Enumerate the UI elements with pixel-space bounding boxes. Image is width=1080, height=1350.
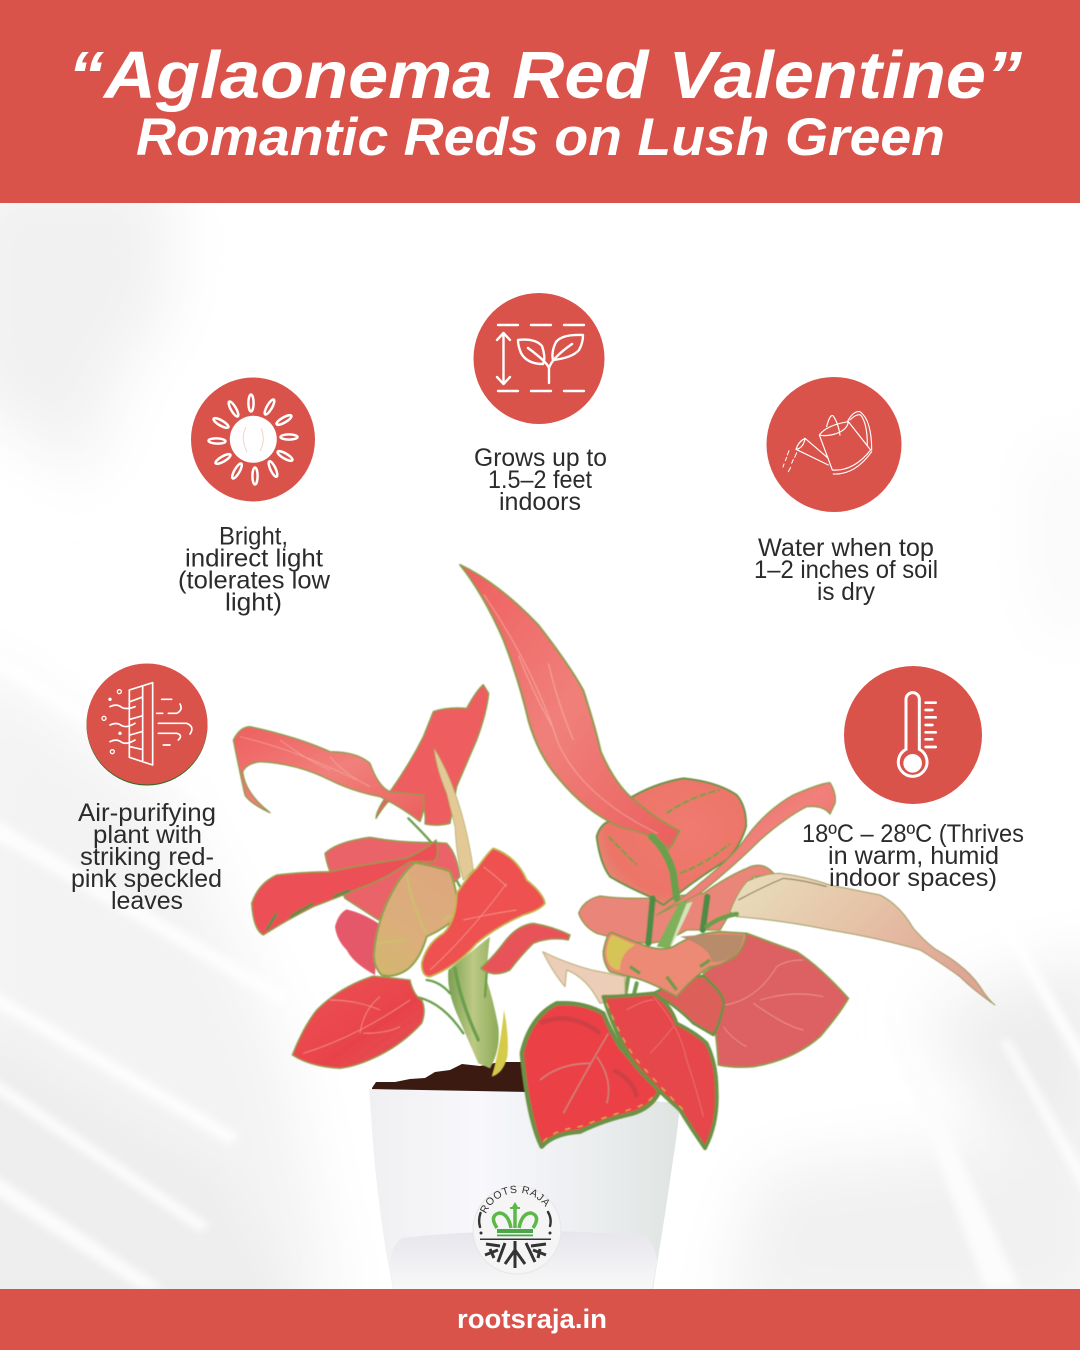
label: light bbox=[178, 522, 331, 616]
label: temperature bbox=[802, 820, 1024, 892]
label: air purifying: plant with bbox=[93, 821, 202, 849]
label: air purifying: leaves bbox=[111, 887, 183, 915]
leaf: left middle behind bbox=[325, 837, 460, 920]
header banner bbox=[0, 0, 1080, 203]
leaf: right round bbox=[597, 778, 746, 905]
right plant cluster, back bbox=[579, 865, 775, 943]
leaf: middle right behind bbox=[579, 865, 775, 943]
logo sticker: ROOTS RAJA bbox=[480, 1186, 549, 1214]
label: water: is dry bbox=[817, 578, 875, 606]
label: air purifying bbox=[71, 799, 222, 915]
leaf: left horizontal bbox=[252, 840, 437, 935]
leaf: right pointed bbox=[657, 783, 835, 915]
feature: water bbox=[754, 377, 938, 606]
pot body bbox=[369, 1089, 680, 1289]
crown bbox=[493, 1207, 537, 1228]
title: “Aglaonema Red Valentine” bbox=[68, 38, 1023, 113]
leaf: center pointed bbox=[603, 993, 717, 1148]
leaf: bright red bbox=[422, 848, 545, 977]
website url: rootsraja.in bbox=[457, 1304, 607, 1334]
feature: air purifying bbox=[71, 664, 222, 915]
feature: temperature bbox=[802, 666, 1024, 892]
pot lower band bbox=[390, 1231, 657, 1289]
label: air purifying: striking red- bbox=[80, 843, 214, 871]
leaf: upper left standing bbox=[376, 685, 489, 825]
leaf: lower left behind bbox=[335, 909, 378, 975]
soil bbox=[372, 1062, 532, 1095]
label: temperature: in warm, humid bbox=[828, 842, 999, 870]
leaf: upper left drooping bbox=[233, 727, 424, 822]
leaf: large right bbox=[703, 933, 848, 1067]
label: light: Bright, bbox=[219, 522, 288, 550]
leaf: bottom left bbox=[292, 976, 424, 1068]
footer banner bbox=[0, 1289, 1080, 1350]
feature: height bbox=[474, 293, 607, 516]
right stems bbox=[625, 837, 737, 997]
label: light: light) bbox=[225, 588, 282, 616]
subtitle: Romantic Reds on Lush Green bbox=[136, 108, 945, 167]
leaf: narrow tan spike bbox=[434, 748, 473, 880]
label: temperature: indoor spaces) bbox=[829, 864, 997, 892]
label: light: (tolerates low bbox=[178, 566, 331, 594]
plant bbox=[233, 565, 995, 1148]
label: air purifying: pink speckled bbox=[71, 865, 222, 893]
icon: watering can bbox=[766, 377, 902, 512]
icon: sun bbox=[191, 378, 315, 502]
label: height: Grows up to bbox=[474, 444, 607, 472]
label: temperature: 18ºC – 28ºC (Thrives bbox=[802, 820, 1024, 848]
leaf: bottom heart bbox=[522, 1003, 660, 1147]
logo sticker bbox=[472, 1186, 562, 1274]
label: height: 1.5–2 feet bbox=[488, 466, 592, 494]
leaf: far right pale bbox=[730, 873, 995, 1005]
label: water: 1–2 inches of soil bbox=[754, 556, 938, 584]
icon: plant height bbox=[474, 293, 604, 424]
roots bbox=[480, 1238, 551, 1240]
label: water bbox=[754, 534, 938, 606]
left plant cluster bbox=[233, 685, 570, 1077]
label: height: indoors bbox=[499, 488, 581, 516]
leaf: small red bbox=[481, 923, 570, 974]
label: light: indirect light bbox=[185, 544, 323, 572]
label: height bbox=[474, 444, 607, 516]
leaf: yellow green small bbox=[603, 932, 746, 997]
label: air purifying: Air-purifying bbox=[78, 799, 216, 827]
leaf: back of center bbox=[653, 976, 724, 1035]
leaf: top tall bbox=[460, 565, 679, 849]
stem: main bbox=[408, 818, 508, 1077]
icon: air filter bbox=[86, 664, 208, 786]
feature: light bbox=[178, 378, 331, 616]
leaf: tan yellow bbox=[374, 863, 459, 976]
leaf: small pale low bbox=[543, 952, 625, 1003]
label: water: Water when top bbox=[758, 534, 934, 562]
plant pot bbox=[369, 1062, 679, 1289]
icon: thermometer bbox=[844, 666, 982, 804]
